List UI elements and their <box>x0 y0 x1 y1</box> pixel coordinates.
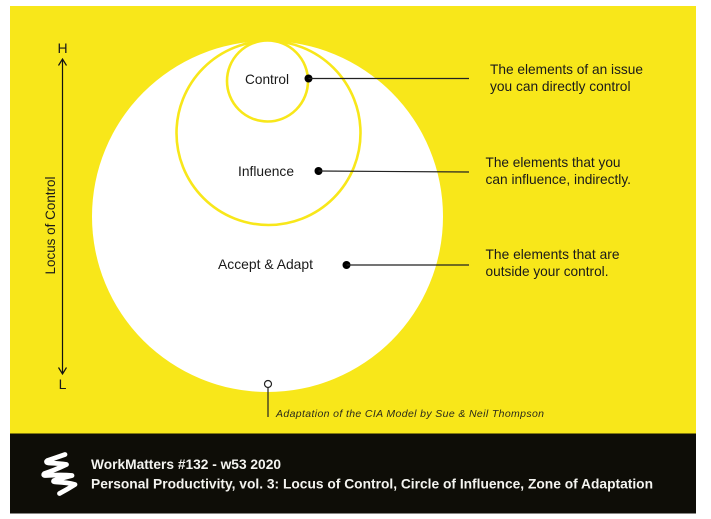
callout: control <box>304 61 643 94</box>
axis label H: H <box>57 40 68 56</box>
panel: yellow background <box>10 6 696 434</box>
callout: accept and adapt <box>342 246 620 279</box>
double-headed arrow <box>58 59 66 374</box>
circle: control <box>227 40 308 122</box>
axis label L: L <box>59 376 67 392</box>
callout: accept and adapt: The elements that are <box>486 246 620 262</box>
callout: control: The elements of an issue <box>490 61 643 77</box>
callout: control: you can directly control <box>490 78 630 94</box>
label: accept and adapt: Accept & Adapt <box>218 256 313 272</box>
axis title: Locus of Control <box>42 176 58 274</box>
callout: influence <box>314 154 631 187</box>
label: control: Control <box>245 71 289 87</box>
circle: influence <box>176 41 360 225</box>
callout: influence: The elements that you <box>486 154 620 170</box>
axis: locus of control <box>42 40 68 392</box>
callout: accept and adapt: outside your control. <box>486 263 608 279</box>
chart: nested circles <box>92 40 443 392</box>
attribution pointer <box>264 380 272 417</box>
icon: logo squiggle <box>44 454 75 494</box>
attribution text: Adaptation of the CIA Model by Sue & Neil Thompson <box>275 408 544 420</box>
circle: accept and adapt <box>92 41 443 392</box>
footer line 1: WorkMatters #132 - w53 2020 <box>91 457 281 472</box>
label: influence: Influence <box>238 163 294 179</box>
footer line 2: Personal Productivity, vol. 3: Locus of Control, Circle of Influence, Zone of Adaptation <box>91 476 653 492</box>
callout: influence: can influence, indirectly. <box>486 171 631 187</box>
panel: footer <box>10 434 696 514</box>
